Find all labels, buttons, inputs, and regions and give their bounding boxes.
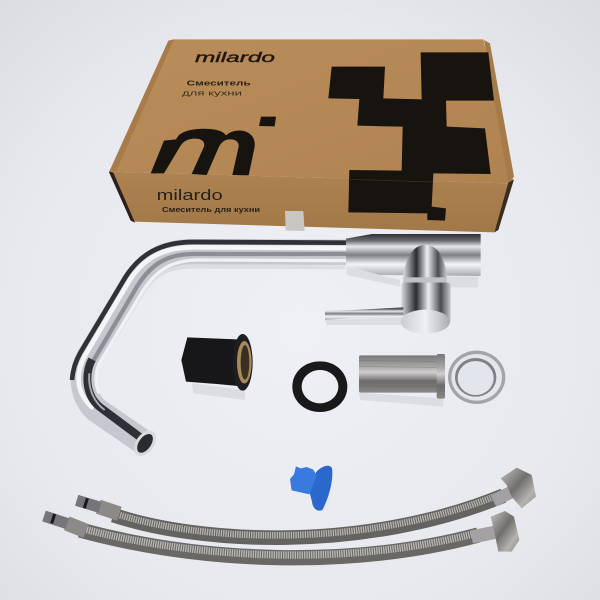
hose 1 o-ring [84,498,87,508]
cylinder collar [437,354,445,399]
hose 1 braid [113,496,503,538]
hose 2 highlight [80,528,478,555]
nut collar [233,334,253,391]
horizontal tube [346,234,481,276]
key head [290,466,317,494]
spout outer dark band [72,242,347,380]
product subtitle on top: для кухни [182,88,242,97]
box left edge shadow [109,171,135,223]
hose 2 left tip [44,516,67,524]
lower cylinder [401,283,451,323]
spout lower highlight [96,260,347,393]
brass insert [237,341,252,384]
tip opening [134,431,156,456]
spout tip [129,426,161,460]
spout body [83,252,347,443]
spout lower reflection [89,373,105,410]
mixer body [325,234,481,334]
box right edge shadow [494,179,514,232]
hose 1 left tip [77,500,100,507]
faucet spout [72,242,347,443]
hose 1 [77,491,513,538]
hose 2 left ferrule [67,523,86,531]
lever end cap [401,310,450,334]
hose 2 right ferrule [472,532,495,537]
hose 1 highlight [113,493,503,535]
box fold line [348,179,433,182]
box top face [110,39,513,183]
hose 2 nut [491,511,519,552]
hose 1 right ferrule [493,491,513,501]
box right flap [484,40,514,183]
big m mark [151,129,255,175]
chrome ring [448,351,505,404]
rubber washer [292,361,347,412]
blue aerator key [290,466,332,511]
spout lower dark band [87,359,142,438]
hose 2 o-ring [52,514,55,523]
brand logo on front: milardo [157,188,223,204]
black plastic nut [181,334,253,391]
product label on front: Смеситель для кухни [162,207,260,214]
hose 2 [44,514,495,558]
square dot [259,117,276,126]
security sticker [285,211,305,231]
ring center [458,361,494,395]
spout inner shadow [95,267,345,403]
ring band [451,354,502,401]
tip rim [129,426,161,460]
soft shadows [192,267,478,407]
insert bore [241,345,249,380]
spout mid band [93,254,347,361]
threaded cylinder [359,354,445,399]
spout upper highlight [79,247,347,408]
hose 1 left ferrule [98,507,119,514]
body collar [403,277,447,283]
brand logo on top: milardo [195,49,275,65]
black pattern [328,52,494,221]
lever handle [325,307,403,320]
aerator key and hoses [44,466,536,558]
hose 2 braid [80,530,478,558]
ring outer [448,351,505,404]
hose 1 nut [501,468,536,508]
box front face [110,172,508,232]
nut body [181,337,245,387]
dark top of vertical cartridge [403,245,447,283]
product title on top: Смеситель [187,78,251,87]
key handle [309,466,332,511]
threads [359,361,437,387]
faucet parts [72,234,505,460]
cylinder [359,355,438,393]
box left flap [109,39,174,172]
cardboard box [109,39,514,232]
ring inner edge [455,358,496,397]
